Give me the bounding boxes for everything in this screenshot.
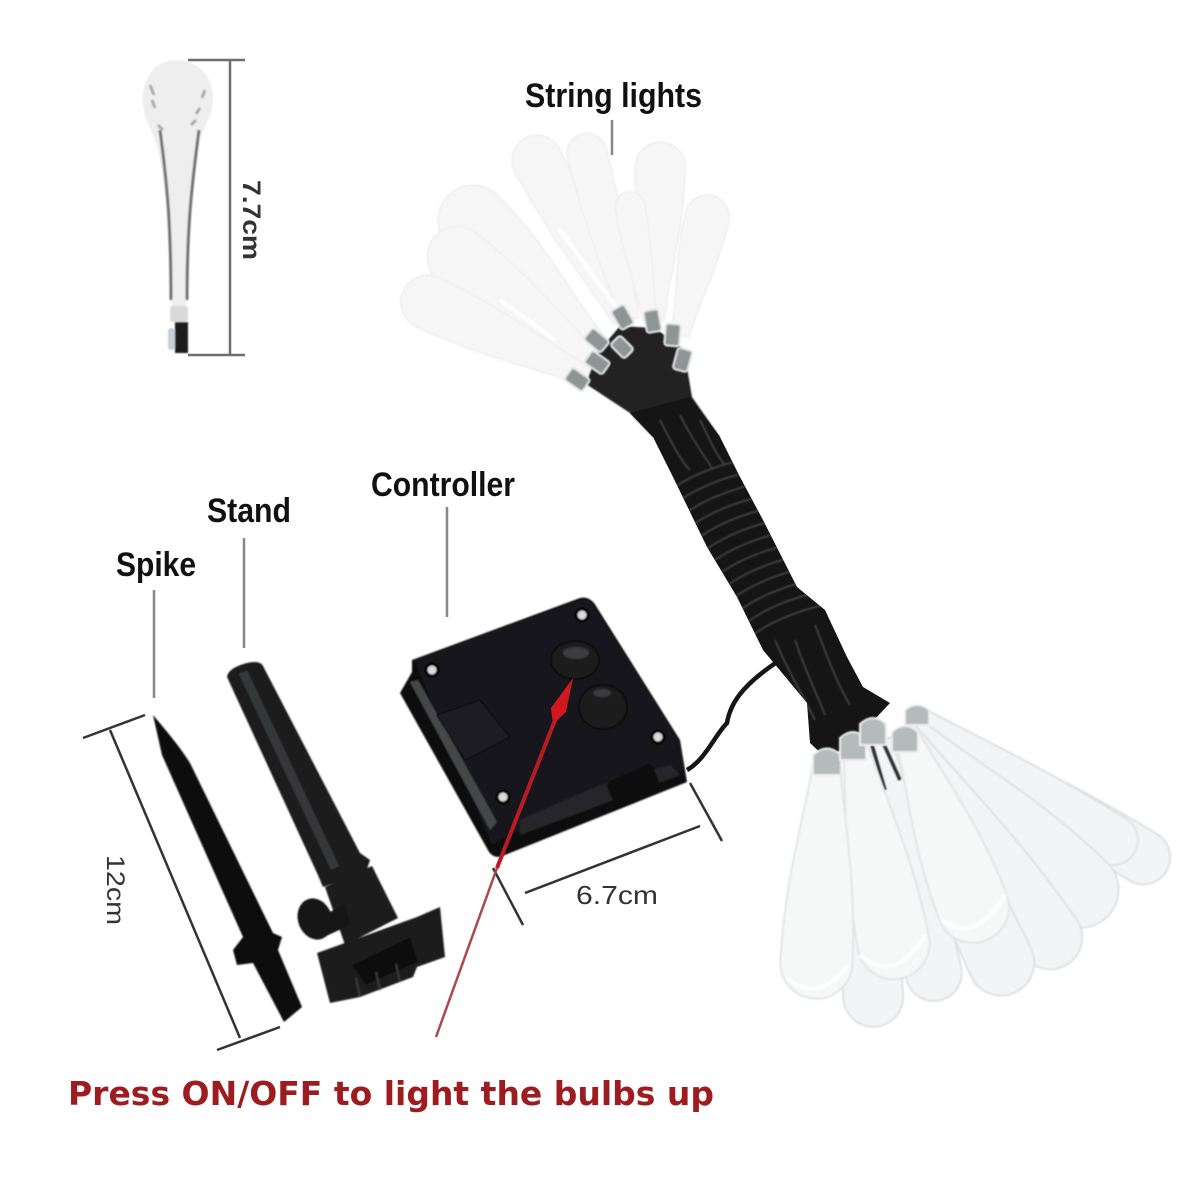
- bottom inner wires: [872, 735, 912, 790]
- controller: [371, 466, 722, 925]
- top bulb cluster: [392, 126, 734, 402]
- label line: stand: [243, 538, 245, 648]
- label line: string lights: [611, 120, 613, 155]
- wire bundle: [630, 397, 890, 760]
- dimension line: spike length: [83, 715, 280, 1050]
- label: Stand: Stand: [207, 492, 291, 530]
- controller box: [400, 598, 687, 857]
- arrow: red pointer to on/off button: [436, 678, 573, 1037]
- label: 12cm: 12cm: [101, 855, 129, 925]
- spike: [83, 546, 302, 1050]
- icon: single water drop bulb: [143, 60, 213, 353]
- label: Spike: Spike: [116, 546, 196, 584]
- label: 7.7cm: 7.7cm: [237, 180, 265, 260]
- dimension line: bulb height: [188, 60, 245, 355]
- string lights: [392, 77, 1180, 1028]
- label line: controller: [446, 507, 448, 617]
- bottom bulb cluster: rear: [830, 694, 1180, 1028]
- top wires fan: [586, 326, 720, 437]
- top LED bases: [564, 304, 693, 392]
- bottom bulb cluster: front: [779, 722, 1019, 1001]
- stand: [207, 492, 445, 1003]
- stand body: [227, 662, 445, 1003]
- label: 6.7cm: 6.7cm: [576, 880, 658, 910]
- label: Controller: Controller: [371, 466, 515, 504]
- bulb highlights: [787, 895, 1005, 989]
- label line: spike: [153, 590, 155, 698]
- caption: press on/off: Press ON/OFF to light the bulbs up: [68, 1074, 714, 1113]
- dimension line: controller width: [493, 783, 722, 925]
- wire strands: [660, 415, 850, 720]
- single bulb with dimension: [143, 60, 265, 355]
- bottom LED bases: [813, 705, 929, 775]
- label: String lights: String lights: [525, 77, 702, 115]
- controller cable: [687, 662, 777, 770]
- spike body: [153, 715, 302, 1022]
